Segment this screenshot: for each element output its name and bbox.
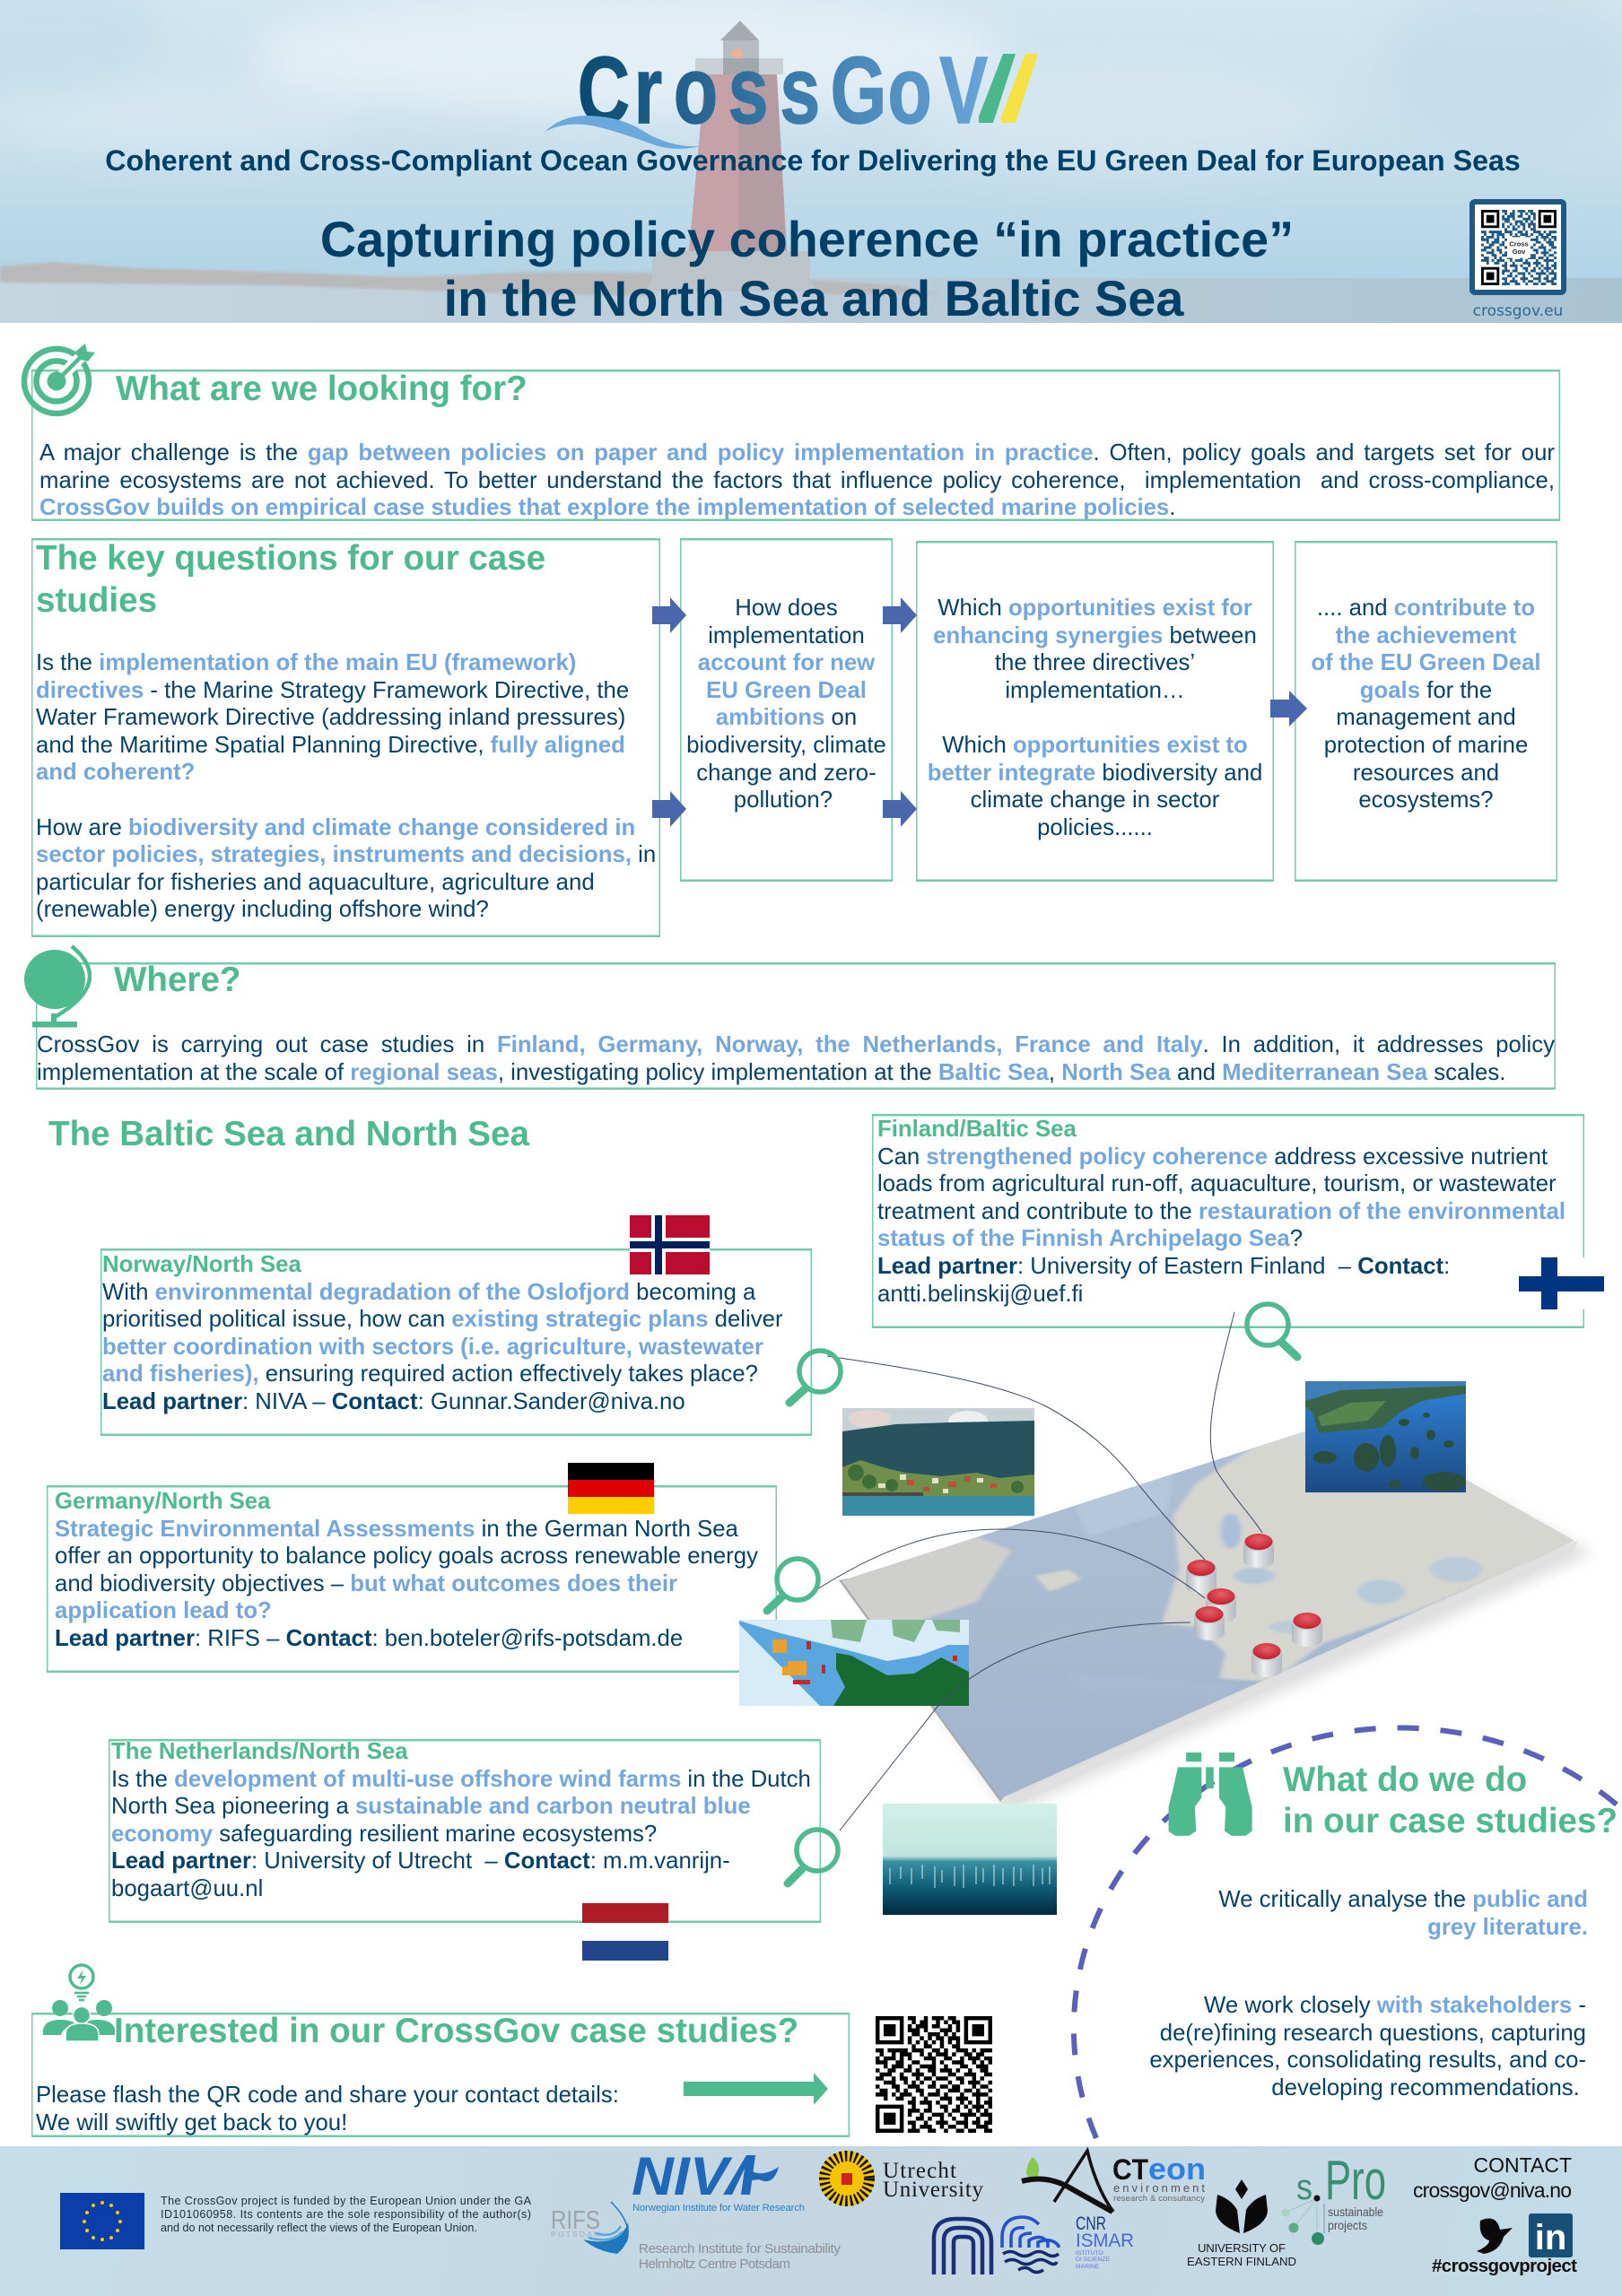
text: analyse literature: grey literature. — [1427, 1915, 1588, 1940]
text: Norway case: Norway/North Sea — [102, 1252, 301, 1277]
text: how does implementation — [686, 596, 886, 813]
panel: question opportunities — [916, 541, 1274, 882]
text: Germany case: Strategic Environmental Assessments in the German North Sea — [55, 1517, 738, 1542]
logo: Utrecht University: Utrecht — [883, 2159, 956, 2183]
text: Germany case: application lead to? — [55, 1598, 272, 1623]
heading: what are we looking for: What are we looking for? — [116, 370, 528, 408]
text: challenge description — [39, 440, 1555, 520]
heading: interested: Interested in our CrossGov case studies? — [114, 2012, 798, 2050]
text: work with stakeholders: We work closely with stakeholders - — [1204, 1993, 1586, 2018]
text: and contribute: goals for the — [1360, 678, 1492, 703]
text: Finland case — [877, 1117, 1565, 1307]
logo: ACTeon: eon — [1148, 2152, 1206, 2187]
icon: people with light bulb — [36, 1960, 135, 2067]
logo: ACTeon: environment — [1113, 2181, 1205, 2195]
text: Norway case: better coordination with sectors (i.e. agriculture, wastewater — [102, 1335, 763, 1360]
text: how does implementation: change and zero- — [696, 761, 876, 786]
main title: Capturing policy coherence “in practice” — [320, 211, 1294, 267]
text: which opportunities: Which opportunities exist to — [942, 733, 1248, 758]
text: key questions body: How are biodiversity and climate change considered in — [36, 815, 635, 840]
text: analyse literature: We critically analyse the public and — [1218, 1887, 1588, 1912]
text: funding statement — [161, 2195, 532, 2234]
logo: ACTeon: research & consultancy — [1113, 2194, 1205, 2204]
text: which opportunities — [928, 596, 1262, 840]
text: and contribute: protection of marine — [1324, 733, 1528, 758]
text: flash the QR code: Please flash the QR code and share your contact details: — [36, 2083, 619, 2108]
text: funding statement: The CrossGov project is funded by the European Union under the GA — [161, 2195, 532, 2207]
panel: what are we looking for — [31, 370, 1560, 521]
text: which opportunities: climate change in sector — [971, 787, 1219, 813]
text: Finland case: Lead partner: University of Eastern Finland – Contact: — [877, 1254, 1450, 1279]
text: Norway case: With environmental degradation of the Oslofjord becoming a — [102, 1280, 755, 1305]
heading: key questions: studies — [36, 581, 157, 619]
icon: linkedin: in — [1535, 2218, 1566, 2257]
text: how does implementation: pollution? — [734, 787, 833, 813]
text: where description — [37, 1032, 1555, 1085]
text: where description: CrossGov is carrying out case studies in Finland, Germany, Norway, the Netherlands, France and Italy. In addition, it addresses policy — [37, 1032, 1555, 1057]
text: contact: CONTACT — [1474, 2153, 1572, 2177]
text: which opportunities: the three directives’ — [995, 650, 1195, 675]
text: key questions body: (renewable) energy including offshore wind? — [36, 897, 489, 922]
text: and contribute — [1311, 596, 1541, 813]
text: key questions body — [36, 650, 656, 922]
text: funding statement: and do not necessarily reflect the views of the European Union. — [161, 2222, 477, 2234]
logo: University of Eastern Finland — [1187, 2179, 1296, 2268]
QR code: crossgov.eu: Gov — [1513, 248, 1526, 256]
panel: question contribution — [1295, 541, 1557, 882]
text: Finland case: Can strengthened policy coherence address excessive nutrient — [877, 1144, 1548, 1170]
text: hashtag: #crossgovproject — [1432, 2256, 1577, 2276]
logo: RIFS: RIFS — [551, 2206, 600, 2235]
logo: CNR ISMAR: CNR — [1076, 2213, 1106, 2234]
logo: RIFS: Research Institute for Sustainability — [639, 2241, 841, 2257]
logo: RIFS: POTSDAM — [551, 2230, 600, 2239]
logo: s.Pro — [1281, 2150, 1386, 2245]
icon: twitter bird — [1477, 2219, 1513, 2254]
text: key questions body: Is the implementation of the main EU (framework) — [36, 650, 576, 675]
text: Netherlands case: Lead partner: University of Utrecht – Contact: m.m.vanrijn- — [111, 1848, 730, 1874]
heading: where: Where? — [114, 961, 240, 999]
text: and contribute: the achievement — [1336, 623, 1516, 648]
text: Norway case: Lead partner: NIVA – Contact: Gunnar.Sander@niva.no — [102, 1389, 685, 1414]
logo: University of Eastern Finland: EASTERN FINLAND — [1187, 2255, 1296, 2268]
text: key questions body: sector policies, strategies, instruments and decisions, in — [36, 842, 656, 867]
connectors from magnifiers to pins — [0, 1300, 1622, 1928]
panel: question implementation — [680, 538, 893, 882]
text: key questions body: directives - the Marine Strategy Framework Directive, the — [36, 678, 629, 703]
text: work with stakeholders — [1077, 1992, 1586, 2101]
icon: magnifier Netherlands — [776, 1821, 848, 1892]
text: work with stakeholders: experiences, consolidating results, and co- — [1149, 2048, 1586, 2073]
text: key questions body: and the Maritime Spatial Planning Directive, fully aligned — [36, 733, 625, 758]
text: Germany case: Lead partner: RIFS – Contact: ben.boteler@rifs-potsdam.de — [55, 1626, 683, 1651]
logo: Utrecht University — [819, 2151, 983, 2206]
text: how does implementation: EU Green Deal — [706, 678, 867, 703]
logo: RIFS: Helmholtz Centre Potsdam — [639, 2257, 790, 2272]
text: contact — [1413, 2153, 1572, 2202]
QR code: contact form — [876, 2016, 992, 2133]
text: Netherlands case: economy safeguarding resilient marine ecosystems? — [111, 1822, 657, 1847]
text: Finland case: treatment and contribute to the restauration of the environmental — [877, 1199, 1565, 1224]
text: Germany case: offer an opportunity to balance policy goals across renewable energy — [55, 1544, 758, 1569]
main title — [320, 211, 1294, 326]
logo: ACTeon: CT — [1112, 2153, 1148, 2186]
logo: s.Pro: Pro — [1325, 2150, 1386, 2212]
logo: CNR ISMAR: MARINE — [1076, 2264, 1100, 2270]
text: how does implementation: How does — [735, 596, 838, 621]
text: which opportunities: Which opportunities exist for — [937, 596, 1252, 621]
logo: NIVA — [632, 2146, 805, 2213]
flag: Norway — [630, 1215, 710, 1274]
logo: CNR ISMAR: ISTITUTO — [1076, 2250, 1103, 2257]
text: Finland case: Finland/Baltic Sea — [877, 1117, 1077, 1142]
panel: key questions — [31, 538, 660, 937]
text: how does implementation: implementation — [708, 623, 865, 648]
text: and contribute: resources and — [1353, 761, 1499, 786]
text: contact: crossgov@niva.no — [1413, 2179, 1572, 2202]
text: analyse literature — [1166, 1886, 1588, 1941]
text: challenge description: A major challenge is the gap between policies on paper and policy implementation in practice. Often, policy goals and targets set for our — [39, 440, 1555, 465]
text: work with stakeholders: de(re)fining research questions, capturing — [1160, 2021, 1586, 2046]
panel: where — [36, 962, 1556, 1090]
footer band with partner logos — [0, 2146, 1622, 2296]
panel: Norway / North Sea — [100, 1248, 812, 1436]
logo: NIVA: NIV — [632, 2146, 733, 2206]
text: Netherlands case: Is the development of multi-use offshore wind farms in the Dutch — [111, 1767, 811, 1792]
text: Germany case: Germany/North Sea — [55, 1489, 270, 1514]
text: Norway case: and fisheries), ensuring required action effectively takes place? — [102, 1361, 758, 1387]
heading: key questions: The key questions for our case — [36, 538, 545, 578]
arrows between question panels — [652, 597, 1307, 827]
map of Europe with pins — [839, 1431, 1589, 1804]
photo: North Sea marine spatial plan — [739, 1620, 969, 1706]
QR code: crossgov.eu: Cross — [1509, 240, 1529, 248]
text: Finland case: antti.belinskij@uef.fi — [877, 1282, 1083, 1307]
text: Netherlands case: The Netherlands/North Sea — [111, 1739, 408, 1764]
text: which opportunities: implementation… — [1005, 678, 1185, 703]
text: flash the QR code: We will swiftly get back to you! — [36, 2110, 347, 2135]
panel: Finland / Baltic Sea — [872, 1114, 1584, 1328]
icon: binoculars — [1162, 1749, 1260, 1839]
text: Germany case: and biodiversity objectives – but what outcomes does their — [55, 1571, 677, 1596]
arrow: to QR code — [684, 2073, 828, 2105]
QR code: crossgov.eu — [1469, 199, 1566, 320]
logo: s.Pro: sustainable — [1328, 2205, 1383, 2219]
map pins — [1186, 1534, 1322, 1677]
main title: in the North Sea and Baltic Sea — [444, 270, 1183, 326]
text: which opportunities: enhancing synergies between — [933, 623, 1257, 648]
text: challenge description: marine ecosystems are not achieved. To better understand the factors that influence policy coherence, implementation and cross-compliance, — [39, 468, 1555, 493]
panel: interested in case studies — [31, 2013, 850, 2137]
heading: what do we do: in our case studies? — [1283, 1802, 1618, 1840]
icon: magnifier Finland — [1238, 1296, 1310, 1368]
photo: Oslofjord village — [842, 1408, 1034, 1516]
text: and contribute: ecosystems? — [1358, 787, 1494, 813]
text: Netherlands case: bogaart@uu.nl — [111, 1876, 263, 1901]
text: and contribute: .... and contribute to — [1317, 596, 1535, 621]
text: flash the QR code — [36, 2082, 619, 2136]
text: which opportunities: better integrate biodiversity and — [928, 761, 1262, 786]
photo: Finnish archipelago — [1305, 1381, 1466, 1492]
text: key questions body: and coherent? — [36, 760, 195, 785]
text: Finland case: loads from agricultural run-off, aquaculture, tourism, or wastewater — [877, 1171, 1557, 1196]
text: and contribute: of the EU Green Deal — [1311, 650, 1541, 675]
flag: Netherlands — [582, 1903, 668, 1961]
logo: CNR ISMAR: DI SCIENZE — [1076, 2257, 1111, 2263]
logo: RIFS — [551, 2202, 841, 2272]
logo: CNR ISMAR: ISMAR — [1076, 2231, 1134, 2251]
text: challenge description: CrossGov builds on empirical case studies that explore the implementation of selected marine policies. — [39, 495, 1175, 520]
icon: globe — [24, 944, 92, 1028]
text: Germany case — [55, 1489, 758, 1651]
logo: ACTeon — [1022, 2151, 1206, 2212]
text: Finland case: status of the Finnish Archipelago Sea? — [877, 1226, 1303, 1251]
flag: Finland — [1519, 1257, 1604, 1309]
photo: offshore wind farm — [883, 1804, 1057, 1915]
heading: key questions — [36, 538, 545, 619]
subtitle: Coherent and Cross-Compliant Ocean Governance for Delivering the EU Green Deal for European Seas — [105, 144, 1521, 177]
logo: s.Pro: s — [1296, 2168, 1312, 2207]
text: funding statement: ID101060958. Its contents are the sole responsibility of the author(s) — [161, 2208, 531, 2221]
logo: University of Eastern Finland: UNIVERSITY OF — [1198, 2241, 1286, 2255]
text: Netherlands case — [111, 1739, 811, 1901]
logo: Utrecht University: University — [883, 2178, 983, 2202]
logo: EU flag — [60, 2193, 144, 2249]
logo: NIVA: Norwegian Institute for Water Research — [632, 2203, 805, 2213]
logo: CNR ISMAR — [934, 2213, 1134, 2274]
heading: the baltic sea and north sea: The Baltic Sea and North Sea — [48, 1115, 529, 1153]
QR code: crossgov.eu: crossgov.eu — [1473, 302, 1563, 320]
icon: magnifier Norway — [776, 1341, 848, 1413]
header background photo: lighthouse — [0, 0, 1622, 323]
heading: what do we do: What do we do — [1283, 1761, 1527, 1799]
text: work with stakeholders: developing recommendations. — [1271, 2075, 1580, 2100]
text: and contribute: management and — [1336, 705, 1516, 730]
text: Norway case: prioritised political issue, how can existing strategic plans deliver — [102, 1307, 783, 1332]
text: how does implementation: account for new — [698, 650, 875, 675]
panel: Germany / North Sea — [47, 1485, 777, 1673]
text: which opportunities: policies...... — [1037, 815, 1153, 840]
logo: s.Pro: projects — [1328, 2218, 1367, 2232]
icon: linkedin — [1529, 2213, 1573, 2257]
text: Netherlands case: North Sea pioneering a sustainable and carbon neutral blue — [111, 1794, 751, 1819]
text: key questions body: particular for fisheries and aquaculture, agriculture and — [36, 870, 595, 895]
text: how does implementation: biodiversity, climate — [686, 733, 886, 758]
icon: magnifier Germany — [758, 1552, 830, 1623]
text: where description: implementation at the scale of regional seas, investigating policy implementation at the Baltic Sea, North Sea and Mediterranean Sea scales. — [37, 1060, 1505, 1085]
flag: Germany — [568, 1463, 654, 1514]
icon: target with arrow — [22, 344, 95, 416]
logo: CrossGov: CrossGoV — [578, 37, 988, 144]
text: Norway case — [102, 1252, 783, 1414]
text: key questions body: Water Framework Directive (addressing inland pressures) — [36, 705, 625, 730]
heading: what do we do — [1283, 1760, 1618, 1842]
text: how does implementation: ambitions on — [716, 705, 857, 730]
panel: The Netherlands / North Sea — [109, 1739, 821, 1923]
